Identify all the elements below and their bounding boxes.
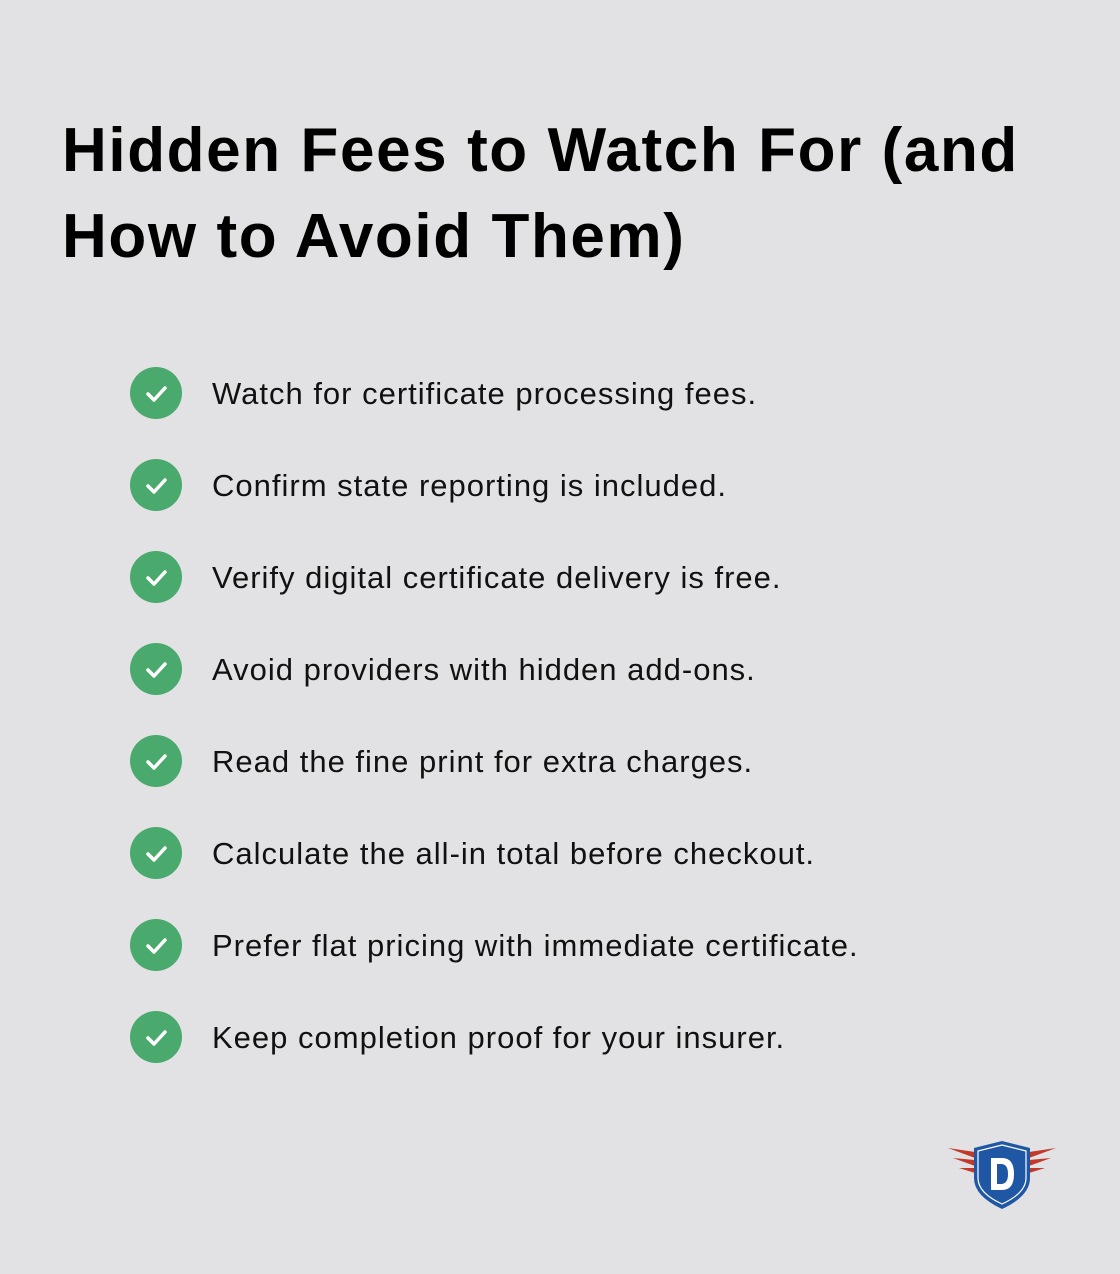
item 8 bbox=[130, 1011, 785, 1063]
item 6: Calculate the all-in total before checkout. bbox=[212, 836, 815, 871]
title bbox=[62, 116, 1019, 271]
item 3 bbox=[130, 551, 782, 603]
item 7 bbox=[130, 919, 859, 971]
logo bbox=[948, 1141, 1056, 1209]
item 2 bbox=[130, 459, 727, 511]
title: Hidden Fees to Watch For (and bbox=[62, 116, 1019, 185]
item 7: Prefer flat pricing with immediate certificate. bbox=[212, 928, 859, 963]
item 4: Avoid providers with hidden add-ons. bbox=[212, 652, 756, 687]
item 1: Watch for certificate processing fees. bbox=[212, 376, 757, 411]
item 5: Read the fine print for extra charges. bbox=[212, 744, 753, 779]
item 1 bbox=[130, 367, 757, 419]
item 2: Confirm state reporting is included. bbox=[212, 468, 727, 503]
item 6 bbox=[130, 827, 815, 879]
item 3: Verify digital certificate delivery is free. bbox=[212, 560, 782, 595]
title: How to Avoid Them) bbox=[62, 202, 686, 271]
item 4 bbox=[130, 643, 756, 695]
item 8: Keep completion proof for your insurer. bbox=[212, 1020, 785, 1055]
item 5 bbox=[130, 735, 753, 787]
